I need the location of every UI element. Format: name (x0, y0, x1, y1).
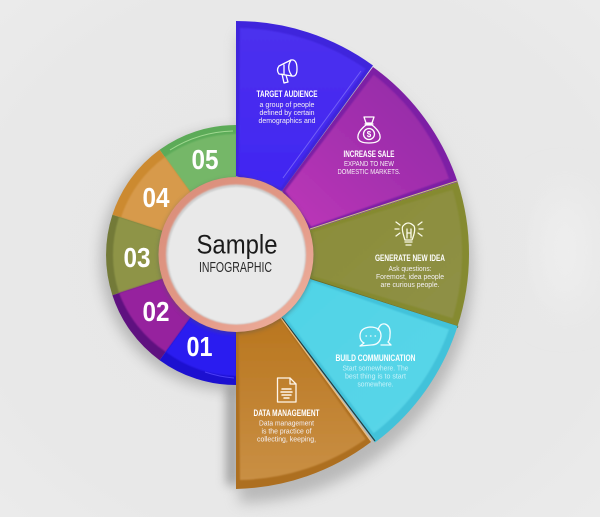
description: Foremost, idea people (376, 274, 444, 281)
drop shadows (101, 36, 473, 503)
segment 01 (160, 255, 236, 385)
icon: money bag (358, 117, 380, 143)
description (342, 366, 409, 388)
segment 04 (112, 150, 236, 255)
description: best thing is to start (345, 374, 406, 380)
description: Data management (259, 421, 314, 428)
center subtitle: INFOGRAPHIC (199, 260, 272, 276)
background glow (545, 190, 585, 310)
wedge: generate new idea (310, 181, 469, 327)
description (258, 102, 316, 125)
description: defined by certain (260, 110, 315, 117)
heading: INCREASE SALE (344, 149, 394, 160)
description: demographics and (258, 118, 316, 125)
icon: megaphone (278, 60, 297, 83)
heading: DATA MANAGEMENT (254, 408, 320, 419)
segment 03: 03 (124, 242, 150, 273)
description: Ask questions: (388, 266, 432, 273)
segment 05: 05 (192, 144, 218, 175)
description: DOMESTIC MARKETS. (338, 169, 401, 176)
description: collecting, keeping, (257, 437, 316, 444)
icon: light bulb (395, 222, 423, 245)
description (257, 421, 316, 444)
left number wheel (106, 125, 236, 385)
icon: money bag: $ (367, 130, 372, 139)
segment 05 (160, 125, 236, 255)
description: somewhere. (358, 382, 394, 388)
icon: document (278, 378, 296, 402)
description: EXPAND TO NEW (344, 161, 394, 168)
segment 02: 02 (142, 296, 170, 327)
segment 04: 04 (142, 182, 170, 213)
description (338, 161, 401, 176)
wedge: target audience (236, 21, 373, 191)
description: are curious people. (380, 282, 440, 289)
icon: chat bubbles (360, 324, 391, 346)
description: a group of people (260, 102, 315, 109)
wedge: build communication (281, 279, 458, 442)
heading: GENERATE NEW IDEA (375, 253, 445, 264)
description: is the practice of (262, 429, 312, 436)
heading: TARGET AUDIENCE (256, 89, 318, 100)
wedge: data management (236, 318, 371, 489)
description: Start somewhere. The (342, 366, 409, 372)
segment 02 (112, 255, 236, 360)
description (376, 266, 444, 289)
heading: BUILD COMMUNICATION (336, 353, 416, 364)
segment 03 (106, 215, 236, 295)
segment 01: 01 (186, 331, 212, 362)
wedge: increase sale (282, 67, 458, 230)
center circle (158, 177, 314, 334)
center title: Sample (196, 230, 278, 260)
